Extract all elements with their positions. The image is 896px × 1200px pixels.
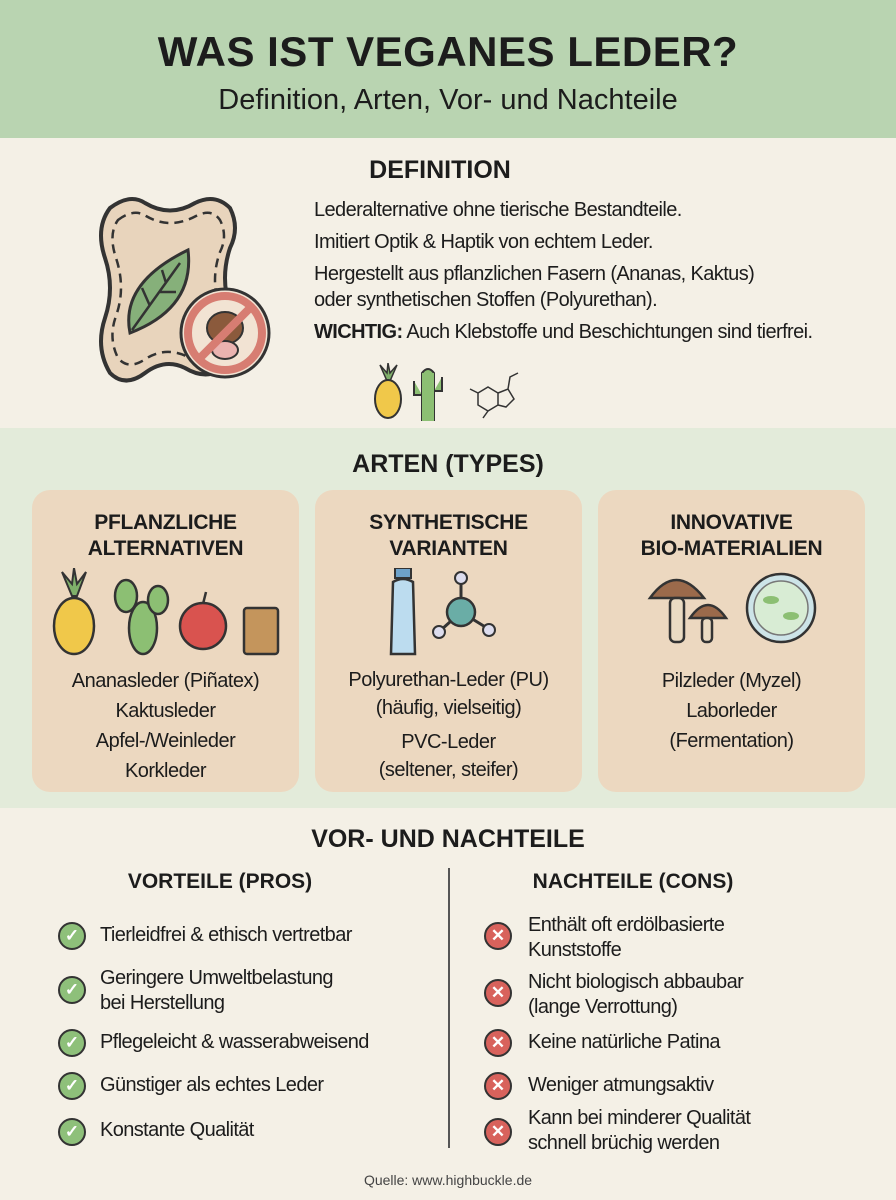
column: vorteile: ✓ [65, 1033, 79, 1052]
text: definition bullets: Imitiert Optik & Haptik von echtem Leder. [314, 231, 653, 253]
text: definition bullets: oder synthetischen Stoffen (Polyurethan). [314, 289, 657, 311]
column: vorteile: ✓ [65, 1076, 79, 1095]
text: definition bullets: WICHTIG: Auch Klebstoffe und Beschichtungen sind tierfrei. [314, 321, 812, 343]
card: pflanzliche: Apfel-/Weinleder [96, 730, 235, 752]
divider [448, 868, 450, 1148]
card: pflanzliche: ALTERNATIVEN [88, 537, 243, 560]
card: bio-materialien: INNOVATIVE [670, 511, 793, 534]
column: nachteile: Weniger atmungsaktiv [528, 1074, 714, 1096]
card: pflanzliche: Ananasleder (Piñatex) [72, 670, 259, 692]
text: definition bullets: Lederalternative ohne tierische Bestandteile. [314, 199, 682, 221]
column: vorteile: Geringere Umweltbelastung [100, 967, 333, 989]
column: nachteile: Nicht biologisch abbaubar [528, 971, 743, 993]
panel: definition [0, 138, 896, 428]
column: nachteile: schnell brüchig werden [528, 1132, 719, 1154]
column: nachteile: ✕ [491, 926, 505, 945]
icons: bottle, molecule [390, 568, 496, 656]
column: vorteile: Günstiger als echtes Leder [100, 1074, 323, 1096]
card: pflanzliche: PFLANZLICHE [94, 511, 237, 534]
card: bio-materialien: Laborleder [686, 700, 777, 722]
column: vorteile [58, 870, 369, 1146]
column: nachteile: ✕ [491, 1076, 505, 1095]
icon: leather with leaf and no-cow [99, 197, 270, 383]
column: vorteile: VORTEILE (PROS) [128, 870, 312, 893]
column: vorteile: ✓ [65, 1122, 79, 1141]
subtitle: Definition, Arten, Vor- und Nachteile [218, 84, 678, 116]
item: ✓ [65, 926, 79, 945]
column: nachteile: NACHTEILE (CONS) [533, 870, 733, 893]
icons: mushrooms, petri dish [648, 572, 816, 644]
card: bio-materialien [598, 490, 865, 792]
item [58, 922, 86, 950]
card: bio-materialien: BIO-MATERIALIEN [641, 537, 822, 560]
card: synthetische [315, 490, 582, 792]
column: nachteile: Kann bei minderer Qualität [528, 1107, 750, 1129]
icons: plants [52, 568, 280, 656]
column: nachteile: ✕ [491, 983, 505, 1002]
text: definition bullets [314, 199, 812, 343]
text: definition bullets: Hergestellt aus pflanzlichen Fasern (Ananas, Kaktus) [314, 263, 754, 285]
card: synthetische: SYNTHETISCHE [369, 511, 528, 534]
column: vorteile: Konstante Qualität [100, 1119, 254, 1141]
card: synthetische: (häufig, vielseitig) [376, 697, 521, 719]
heading: arten: ARTEN (TYPES) [352, 450, 544, 478]
panel: pros and cons [0, 808, 896, 1200]
heading: definition: DEFINITION [369, 156, 511, 184]
column: nachteile: Keine natürliche Patina [528, 1031, 720, 1053]
card: pflanzliche: Kaktusleder [115, 700, 216, 722]
panel: types [0, 428, 896, 808]
card: synthetische: VARIANTEN [389, 537, 508, 560]
card: bio-materialien: (Fermentation) [669, 730, 794, 752]
source: Quelle: www.highbuckle.de [364, 1172, 532, 1188]
card: synthetische: (seltener, steifer) [379, 759, 518, 781]
column: nachteile: Enthält oft erdölbasierte [528, 914, 724, 936]
heading: vor- und nachteile: VOR- UND NACHTEILE [311, 825, 585, 853]
column: nachteile: ✕ [491, 1122, 505, 1141]
icons: pineapple, cactus, molecule [374, 363, 518, 421]
column: nachteile [484, 870, 751, 1154]
card: pflanzliche: Korkleder [125, 760, 206, 782]
card: bio-materialien: Pilzleder (Myzel) [662, 670, 801, 692]
card: synthetische: PVC-Leder [401, 731, 496, 753]
column: nachteile: ✕ [491, 1033, 505, 1052]
column: vorteile: bei Herstellung [100, 992, 224, 1014]
title: WAS IST VEGANES LEDER? [158, 28, 738, 75]
column: nachteile: (lange Verrottung) [528, 996, 677, 1018]
card: pflanzliche [32, 490, 299, 792]
header [0, 0, 896, 138]
column: vorteile: Pflegeleicht & wasserabweisend [100, 1031, 369, 1053]
column: vorteile: Tierleidfrei & ethisch vertretbar [100, 924, 352, 946]
card: synthetische: Polyurethan-Leder (PU) [348, 669, 549, 691]
column: vorteile: ✓ [65, 980, 79, 999]
column: nachteile: Kunststoffe [528, 939, 621, 961]
